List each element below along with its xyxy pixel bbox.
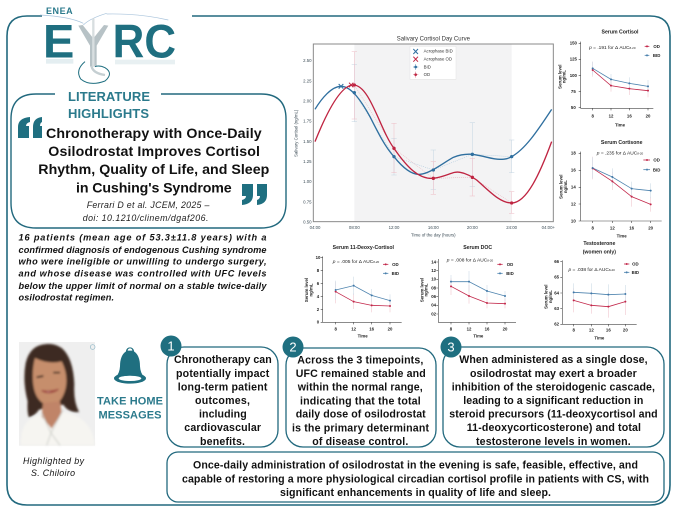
chart: serum cortisone: 8 (591, 225, 594, 230)
chart: serum DOC: 14 (431, 259, 437, 264)
chart: serum DOC: 8 (450, 326, 453, 331)
photo caption (23, 456, 85, 478)
message 2: Across the 3 timepoints, (297, 354, 423, 366)
icon: bell (114, 347, 146, 384)
chart: serum cortisol: 150 (570, 41, 578, 46)
chart: serum DOC: Serum DOC (463, 245, 492, 251)
chart: testosterone: 20 (623, 328, 628, 333)
chart: testosterone: 65 (554, 275, 560, 280)
message 3: testosterone levels in women. (476, 436, 631, 448)
chart: serum cortisol: 12 (609, 113, 614, 118)
message 1: including (199, 408, 247, 420)
chart: salivary cortisol day curve: Salivary Cortisol Day Curve (397, 37, 471, 43)
chart: serum cortisone (559, 140, 662, 238)
citation: doi: 10.1210/clinem/dgaf206. (83, 213, 208, 223)
chart: serum cortisone: Serum level (559, 175, 564, 199)
chart: serum 11-deoxy-cortisol: p = .005 for Δ AUC8-20 (332, 259, 380, 265)
chart: testosterone: 16 (606, 328, 611, 333)
chart: serum DOC: 06 (431, 294, 437, 299)
message 1: benefits. (200, 436, 245, 448)
chart: serum DOC: Time (473, 333, 484, 338)
chart: testosterone: BID (632, 270, 639, 275)
message 1: 1 (167, 338, 175, 354)
chart: salivary cortisol day curve: 0.50 (303, 219, 312, 224)
message 2: of disease control. (312, 436, 408, 448)
message 1: Chronotherapy can (174, 354, 272, 366)
chart: testosterone: OD (632, 262, 639, 267)
chart: salivary cortisol day curve: 1.25 (303, 159, 312, 164)
chart: serum cortisol: 16 (627, 113, 632, 118)
chart: serum cortisol: BID (653, 53, 660, 58)
chart: salivary cortisol day curve: 1.50 (303, 139, 312, 144)
chart: testosterone: 66 (554, 259, 560, 264)
chart: salivary cortisol day curve: 1.00 (303, 179, 312, 184)
chart: salivary cortisol day curve: Time of the day (hours) (411, 233, 456, 238)
citation (83, 200, 209, 223)
chart: serum cortisol: p = .191 for Δ AUC8-20 (588, 45, 636, 51)
chart: testosterone: Serum level (544, 285, 549, 309)
message 2: daily dose of osilodrostat (296, 409, 426, 421)
chart: testosterone: (women only) (583, 249, 616, 255)
message 3: leading to a significant reduction in (463, 395, 643, 407)
chart: testosterone: 62 (554, 322, 560, 327)
citation: Ferrari D et al. JCEM, 2025 – (87, 200, 209, 210)
chart: testosterone: 8 (572, 328, 575, 333)
chart: serum cortisol: 50 (571, 105, 576, 110)
title text: Chronotherapy with Once-Daily (46, 126, 262, 142)
chart: serum 11-deoxy-cortisol: 8 (334, 326, 337, 331)
logo (40, 6, 176, 83)
chart: salivary cortisol day curve: 08:00 (349, 225, 360, 230)
chart legend (410, 46, 456, 79)
logo: E (43, 15, 74, 68)
chart: serum DOC: 10 (431, 277, 437, 282)
message 1: outcomes, (195, 395, 250, 407)
message 2: within the normal range, (297, 382, 423, 394)
chart: salivary cortisol day curve: 1.75 (303, 119, 312, 124)
message 2 (282, 336, 436, 448)
chart: serum cortisol: 8 (591, 113, 594, 118)
chart: serum cortisone: 18 (571, 151, 576, 156)
chart: serum cortisone: 12 (571, 201, 576, 206)
study description: below the upper limit of normal on a stable twice-daily (18, 281, 267, 291)
chart: salivary cortisol day curve: 24:00 (506, 225, 518, 230)
chart: serum DOC: 16 (485, 326, 490, 331)
chart: testosterone: Testosterone (583, 241, 615, 247)
chart: serum cortisol: ng/mL (562, 70, 567, 83)
chart: serum cortisol: 75 (571, 89, 576, 94)
study description: who were ineligible or unwilling to undergo surgery, (18, 257, 266, 267)
chart: serum cortisol (557, 30, 660, 127)
chart: serum 11-deoxy-cortisol: Time (358, 333, 368, 338)
chart: serum cortisone: p = .235 for Δ AUC8-20 (596, 151, 644, 157)
chart: serum cortisone: 12 (610, 225, 615, 230)
chart: salivary cortisol day curve: 04:00+ (542, 225, 555, 230)
message 3: When administered as a single dose, (459, 354, 648, 366)
chart: serum cortisol: Serum level (557, 65, 562, 89)
chart: serum cortisone: 20 (648, 225, 654, 230)
chart: testosterone: 12 (589, 328, 594, 333)
take home messages: TAKE HOME (97, 396, 163, 408)
chart: serum cortisone: BID (653, 167, 660, 172)
title text: Rhythm, Quality of Life, and Sleep (38, 162, 270, 178)
message 3 (440, 336, 664, 448)
message 3: steroid precursors (11-deoxycortisol and (449, 408, 658, 420)
chart: serum cortisol: 20 (646, 113, 651, 118)
chart: serum 11-deoxy-cortisol (304, 245, 402, 338)
chart: serum 11-deoxy-cortisol: 4 (317, 294, 320, 299)
chart: salivary cortisol day curve: 0.75 (303, 199, 312, 204)
study description: 16 patients (mean age of 53.3±11.8 years) with a (18, 233, 266, 243)
message 3: 11-deoxycorticosterone) and total (467, 422, 641, 434)
chart: serum DOC: 12 (467, 326, 472, 331)
chart: salivary cortisol day curve (293, 37, 555, 238)
chart: serum DOC: 04 (431, 303, 437, 308)
chart: serum 11-deoxy-cortisol: 0 (317, 320, 320, 325)
chart: serum 11-deoxy-cortisol: 20 (388, 326, 393, 331)
chart: serum cortisone: Serum Cortisone (601, 140, 643, 146)
OD curve (315, 85, 552, 203)
chart: serum cortisone: Time (617, 233, 627, 238)
message 2: UFC remained stable and (296, 368, 426, 380)
chart: serum DOC: p = .008 for Δ AUC8-20 (446, 258, 494, 264)
chart: salivary cortisol day curve: 2.25 (303, 78, 312, 83)
chart: serum DOC: 08 (431, 285, 437, 290)
chart: serum 11-deoxy-cortisol: BID (392, 271, 399, 276)
chart: serum DOC: 12 (431, 268, 437, 273)
photo: portrait (19, 342, 95, 446)
chart: testosterone (544, 241, 639, 340)
chart legend: BID (424, 64, 431, 69)
conclusion: significant enhancements in quality of life and sleep. (280, 487, 551, 499)
chart: serum DOC: 02 (431, 311, 437, 316)
chart: salivary cortisol day curve: 16:00 (428, 225, 439, 230)
chart legend: OD (424, 72, 430, 77)
message 1 (160, 336, 278, 448)
message 3: osilodrostat may exert a broader (470, 368, 637, 380)
literature highlights heading: HIGHLIGHTS (68, 106, 149, 121)
chart: serum cortisone: 10 (571, 218, 576, 223)
photo caption: S. Chiloiro (31, 468, 75, 478)
chart: serum DOC: 20 (503, 326, 508, 331)
chart: serum DOC (419, 245, 516, 338)
chart: serum cortisol: 125 (570, 57, 578, 62)
chart: serum 11-deoxy-cortisol: 2 (317, 307, 320, 312)
chart: testosterone: 64 (554, 290, 560, 295)
chart: salivary cortisol day curve: 2.50 (303, 58, 312, 63)
message 2: is the primary determinant (292, 422, 429, 434)
chart: serum cortisone: 16 (571, 168, 576, 173)
message 2: 2 (289, 340, 297, 354)
study description: and whose disease was controlled with UFC levels (18, 269, 266, 279)
photo caption: Highlighted by (23, 456, 85, 466)
message 1: potentially impact (176, 368, 270, 380)
study description: confirmed diagnosis of endogenous Cushing syndrome (18, 245, 266, 255)
chart: serum 11-deoxy-cortisol: 16 (369, 326, 375, 331)
take home messages: MESSAGES (98, 410, 162, 422)
chart legend: Acrophase OD (424, 56, 452, 61)
quote mark right (242, 184, 267, 205)
title text: in Cushing's Syndrome (76, 180, 232, 196)
chart: testosterone: Time (594, 335, 605, 340)
literature highlights heading: LITERATURE (68, 89, 150, 104)
message 2: indicating that the total (300, 395, 421, 407)
chart: serum 11-deoxy-cortisol: 6 (317, 281, 320, 286)
literature highlights heading (68, 89, 150, 121)
chart: serum cortisol: OD (653, 44, 660, 49)
title text: Osilodrostat Improves Cortisol (48, 144, 260, 160)
logo: RC (113, 15, 176, 68)
chart: serum cortisone: OD (653, 158, 660, 163)
chart: salivary cortisol day curve: 04:00 (310, 225, 321, 230)
message 3: 3 (447, 340, 455, 354)
chart: serum cortisone: 14 (571, 185, 576, 190)
chart: serum 11-deoxy-cortisol: 12 (351, 326, 357, 331)
chart: salivary cortisol day curve: Salivary Cortisol (ng/mL) (293, 109, 298, 157)
chart: serum DOC: ng/mL (424, 283, 429, 296)
title text (38, 126, 270, 196)
conclusion (167, 452, 664, 502)
chart: serum 11-deoxy-cortisol: Serum 11-Deoxy-Cortisol (333, 245, 395, 251)
message 1: cardiovascular (184, 422, 261, 434)
logo: ENEA (46, 6, 73, 16)
chart: testosterone: p = .038 for Δ AUC8-20 (567, 267, 615, 273)
chart legend: Acrophase BID (424, 48, 453, 53)
chart: testosterone: ng/mL (548, 290, 553, 303)
message 1: long-term patient (178, 382, 268, 394)
chart: serum 11-deoxy-cortisol: 10 (316, 255, 321, 260)
message 3: inhibition of the steroidogenic cascade, (452, 382, 655, 394)
take home messages (97, 396, 163, 422)
study description: osilodrostat regimen. (18, 293, 114, 303)
chart: serum cortisol: 100 (570, 73, 578, 78)
conclusion: capable of restoring a more physiological circadian cortisol profile in patients with CS, with (182, 474, 649, 486)
quote mark left (18, 117, 42, 138)
chart: serum DOC: Serum level (419, 278, 424, 302)
chart: serum cortisol: Serum Cortisol (602, 30, 639, 36)
chart: serum DOC: BID (506, 271, 514, 276)
chart: serum 11-deoxy-cortisol: ng/mL (308, 283, 313, 296)
chart: serum DOC: OD (507, 262, 513, 267)
study description (18, 233, 267, 303)
chart: serum cortisol: Time (615, 122, 626, 127)
chart: testosterone: 63 (554, 306, 560, 311)
chart: serum 11-deoxy-cortisol: Serum level (304, 278, 309, 302)
chart: salivary cortisol day curve: 20:00 (467, 225, 478, 230)
chart: serum 11-deoxy-cortisol: 8 (317, 268, 320, 273)
chart: serum 11-deoxy-cortisol: OD (392, 262, 399, 267)
chart: salivary cortisol day curve: 12:00 (389, 225, 400, 230)
title panel (11, 89, 286, 228)
BID curve (315, 86, 552, 174)
conclusion: Once-daily administration of osilodrostat in the evening is safe, feasible, effective, and (193, 460, 638, 472)
chart: salivary cortisol day curve: 2.00 (303, 99, 312, 104)
chart: serum cortisone: 16 (629, 225, 635, 230)
chart: serum cortisone: ng/mL (563, 180, 568, 193)
